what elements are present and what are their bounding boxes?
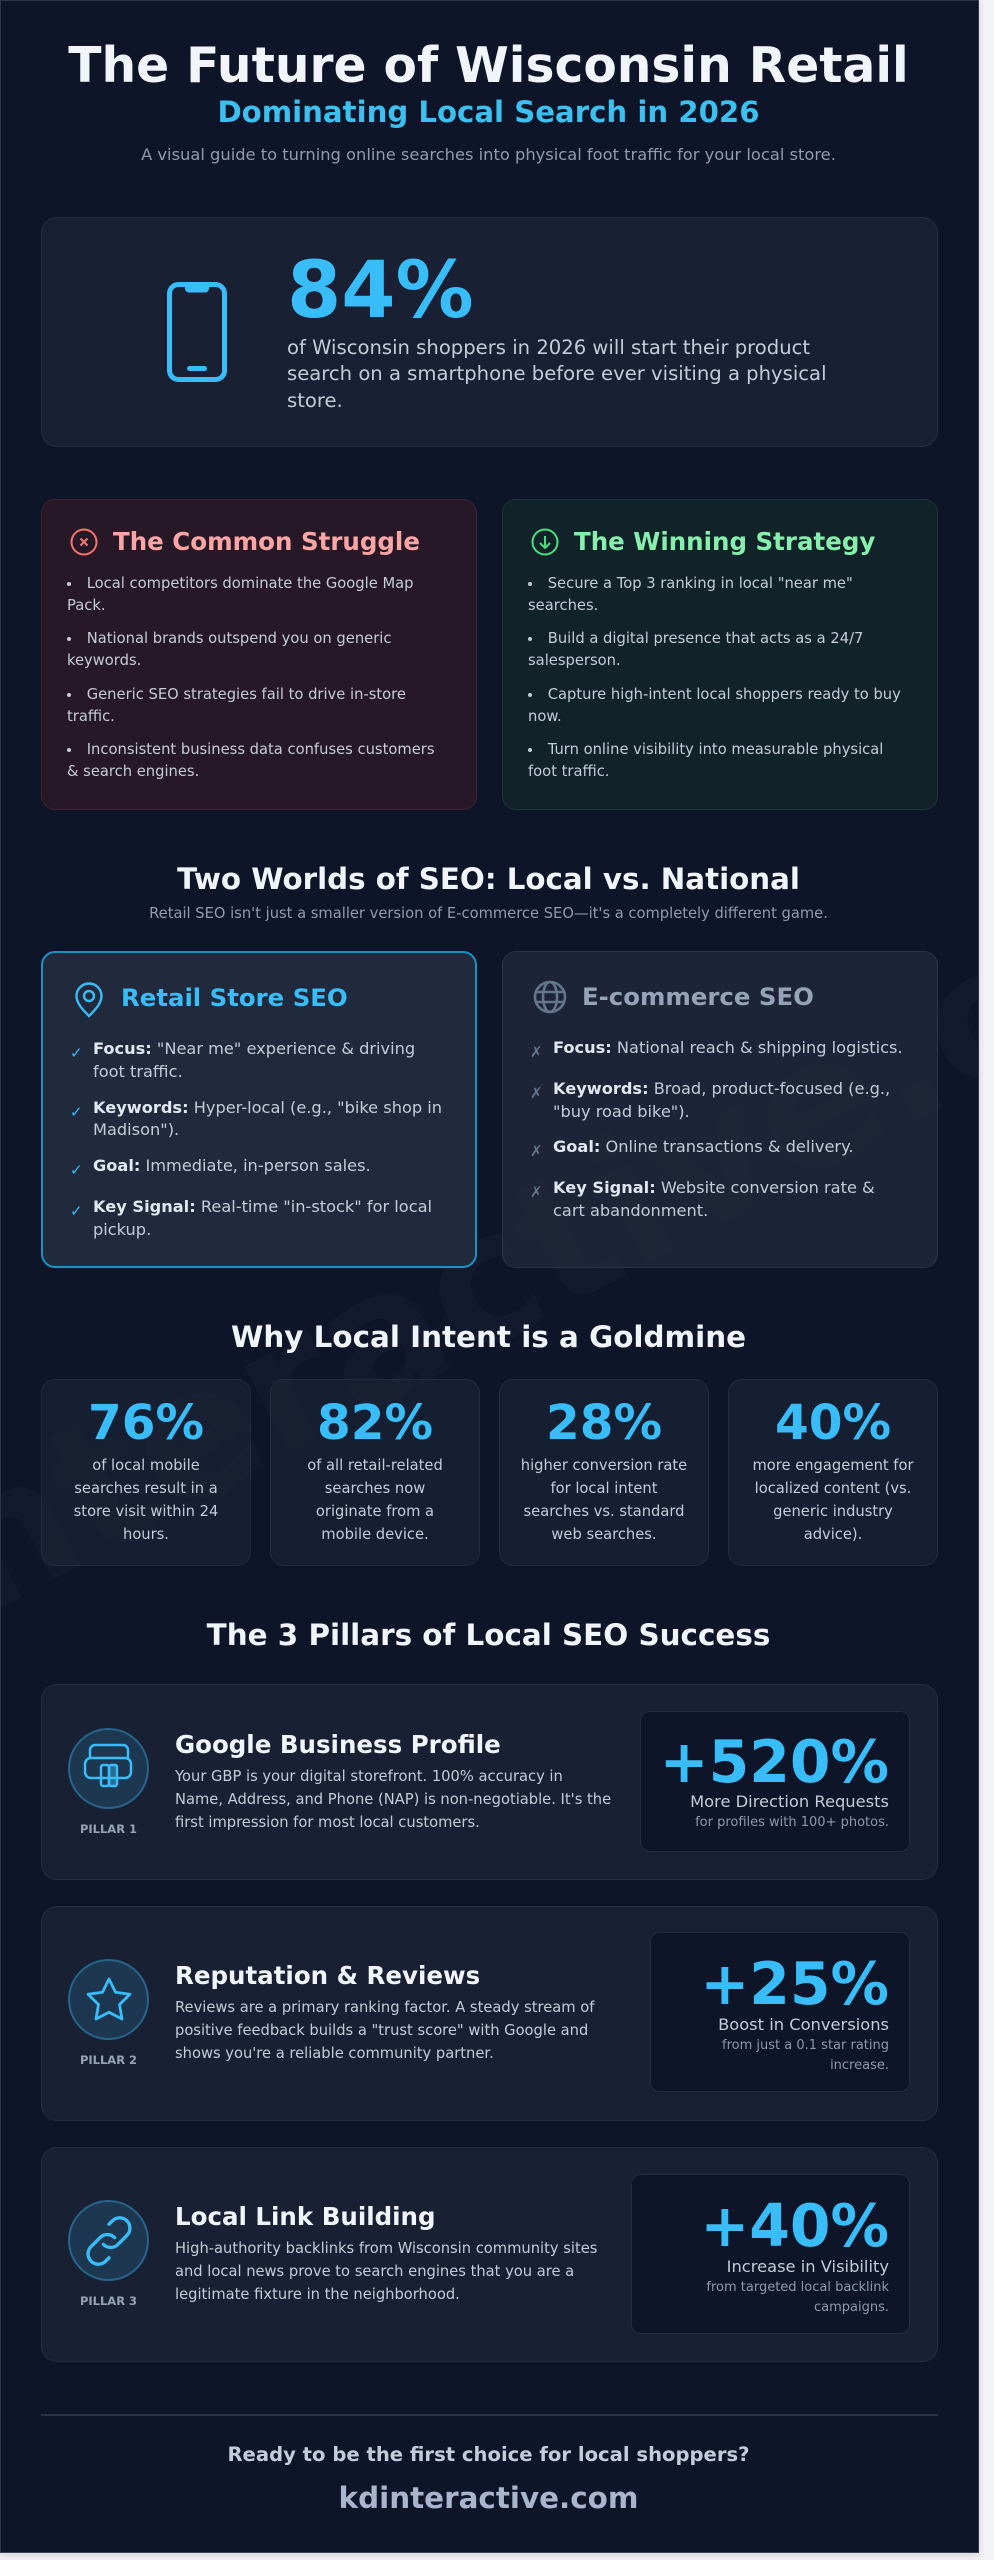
- stat card: 82%: [270, 1379, 480, 1566]
- icon: smartphone: [167, 282, 227, 382]
- pillar text: first impression for most local customers.: [175, 1814, 480, 1831]
- result note: campaigns.: [814, 2300, 889, 2314]
- panel: pillar 3: [41, 2147, 938, 2362]
- panel: e-commerce seo: [502, 951, 938, 1268]
- icon: x circle: [70, 528, 98, 556]
- list: strategies: Build a digital presence that acts as a 24/7: [548, 630, 863, 647]
- panel: retail store seo: ✓: [70, 1202, 83, 1220]
- list: struggles: [67, 575, 434, 780]
- panel: hero stat: [41, 217, 938, 447]
- list: e-commerce: Keywords: Broad, product-focused (e.g.,: [553, 1079, 890, 1098]
- hero description: store.: [287, 389, 343, 412]
- list: struggles: keywords.: [67, 652, 141, 669]
- icon: storefront: [68, 1728, 149, 1809]
- hero description: [287, 336, 827, 412]
- icon: link: [68, 2200, 149, 2281]
- list: retail: [70, 1039, 442, 1239]
- list: struggles: Local competitors dominate the Google Map: [87, 575, 414, 592]
- icon: arrow down circle: [532, 528, 558, 556]
- big number: 84%: [287, 246, 474, 336]
- footer call to action: Ready to be the first choice for local shoppers?: [227, 2443, 750, 2466]
- stat card: 76%: store visit within 24: [74, 1503, 218, 1520]
- pillar label: PILLAR 2: [80, 2053, 137, 2067]
- panel: the winning strategy: [502, 499, 938, 810]
- result box: [631, 2174, 910, 2334]
- stat card: 40%: generic industry: [773, 1503, 893, 1520]
- stat card: 82%: of all retail-related: [307, 1457, 443, 1474]
- panel: e-commerce seo: ✗: [530, 1043, 543, 1061]
- stat card: 40%: localized content (vs.: [755, 1480, 911, 1497]
- list: strategies: Secure a Top 3 ranking in local "near me": [548, 575, 853, 592]
- pillar title: Reputation & Reviews: [175, 1961, 480, 1990]
- result number: +40%: [700, 2192, 889, 2260]
- list: strategies: searches.: [528, 597, 598, 614]
- pillar text: Your GBP is your digital storefront. 100% accuracy in: [175, 1768, 563, 1785]
- list: retail: Goal: Immediate, in-person sales.: [93, 1156, 371, 1175]
- stat card: 76%: [41, 1379, 251, 1566]
- panel: e-commerce seo: ✗: [530, 1084, 543, 1102]
- panel: e-commerce seo: ✗: [530, 1183, 543, 1201]
- icon: globe: [534, 980, 566, 1014]
- list: strategies: now.: [528, 708, 562, 725]
- heading: The Common Struggle: [113, 527, 420, 556]
- result label: Boost in Conversions: [718, 2015, 889, 2034]
- panel: retail store seo: ✓: [70, 1161, 83, 1179]
- panel: retail store seo: [41, 951, 477, 1268]
- result note: [706, 2280, 889, 2314]
- list: e-commerce: cart abandonment.: [553, 1201, 708, 1220]
- stat card: 82%: mobile device.: [321, 1526, 429, 1543]
- result note: from targeted local backlink: [706, 2280, 889, 2295]
- pillar label: PILLAR 1: [80, 1822, 137, 1836]
- stat card: 82%: 82%: [317, 1395, 433, 1451]
- pillar text: Name, Address, and Phone (NAP) is non-negotiable. It's the: [175, 1791, 611, 1808]
- hero description: of Wisconsin shoppers in 2026 will start their product: [287, 336, 810, 359]
- pillar title: Local Link Building: [175, 2202, 436, 2231]
- icon: star: [68, 1959, 149, 2040]
- pillar text: [175, 1999, 595, 2062]
- stat card: 82%: originate from a: [316, 1503, 434, 1520]
- stat card: 40%: advice).: [804, 1526, 862, 1543]
- list: strategies: Capture high-intent local shoppers ready to buy: [548, 686, 901, 703]
- result number: +520%: [660, 1728, 889, 1796]
- panel: retail store seo: ✓: [70, 1103, 83, 1121]
- list: e-commerce: [530, 1038, 903, 1220]
- list: e-commerce: "buy road bike").: [553, 1102, 690, 1121]
- list: struggles: traffic.: [67, 708, 115, 725]
- stat card: 76%: hours.: [123, 1526, 169, 1543]
- stat card: 40%: [728, 1379, 938, 1566]
- heading: two worlds: Two Worlds of SEO: Local vs. National: [177, 862, 800, 896]
- stat card: 76%: 76%: [88, 1395, 204, 1451]
- stat card: 40%: more engagement for: [752, 1457, 914, 1474]
- list: strategies: salesperson.: [528, 652, 621, 669]
- result label: Increase in Visibility: [727, 2257, 889, 2276]
- list: strategies: Turn online visibility into measurable physical: [548, 741, 883, 758]
- title: The Future of Wisconsin Retail: [68, 38, 909, 94]
- list: retail: foot traffic.: [93, 1062, 183, 1081]
- stat card: 28%: searches vs. standard: [524, 1503, 684, 1520]
- footer website: kdinteractive.com: [339, 2481, 638, 2515]
- pillar text: positive feedback builds a "trust score" with Google and: [175, 2022, 588, 2039]
- pillar title: Google Business Profile: [175, 1730, 501, 1759]
- heading: Retail Store SEO: [121, 983, 348, 1012]
- heading: pillars: The 3 Pillars of Local SEO Success: [207, 1618, 770, 1652]
- stat card: 28%: web searches.: [551, 1526, 657, 1543]
- stat card: 76%: searches result in a: [74, 1480, 218, 1497]
- pillar text: Reviews are a primary ranking factor. A steady stream of: [175, 1999, 594, 2016]
- result note: increase.: [830, 2058, 889, 2072]
- icon: map pin: [75, 982, 103, 1018]
- list: retail: Key Signal: Real-time "in-stock" for local: [93, 1197, 432, 1216]
- pillar text: [175, 2240, 597, 2303]
- hero description: search on a smartphone before ever visiting a physical: [287, 362, 827, 385]
- result note: for profiles with 100+ photos.: [695, 1815, 889, 1830]
- section intro: Retail SEO isn't just a smaller version of E-commerce SEO—it's a completely different game.: [149, 905, 828, 922]
- list: e-commerce: Key Signal: Website conversion rate &: [553, 1178, 875, 1197]
- stat card: 76%: of local mobile: [92, 1457, 200, 1474]
- pillar text: [175, 1768, 611, 1831]
- list: struggles: Inconsistent business data confuses customers: [87, 741, 434, 758]
- list: retail: Focus: "Near me" experience & driving: [93, 1039, 415, 1058]
- result box: [640, 1711, 910, 1852]
- stat card: 28%: higher conversion rate: [521, 1457, 687, 1474]
- list: struggles: & search engines.: [67, 763, 199, 780]
- panel: pillar 2: [41, 1906, 938, 2121]
- heading: goldmine: Why Local Intent is a Goldmine: [231, 1320, 746, 1354]
- list: retail: Madison").: [93, 1120, 179, 1139]
- heading: The Winning Strategy: [574, 527, 875, 556]
- stat card: 28%: for local intent: [550, 1480, 658, 1497]
- subtitle: Dominating Local Search in 2026: [217, 95, 760, 129]
- list: retail: Keywords: Hyper-local (e.g., "bike shop in: [93, 1098, 442, 1117]
- list: e-commerce: Goal: Online transactions & delivery.: [553, 1137, 854, 1156]
- list: struggles: Generic SEO strategies fail to drive in-store: [87, 686, 406, 703]
- result label: More Direction Requests: [690, 1792, 889, 1811]
- panel: the common struggle: [41, 499, 477, 810]
- result number: +25%: [700, 1950, 889, 2018]
- pillar text: shows you're a reliable community partner.: [175, 2045, 494, 2062]
- list: struggles: Pack.: [67, 597, 106, 614]
- pillar text: legitimate fixture in the neighborhood.: [175, 2286, 460, 2303]
- panel: retail store seo: ✓: [70, 1044, 83, 1062]
- panel: e-commerce seo: ✗: [530, 1142, 543, 1160]
- list: retail: pickup.: [93, 1220, 151, 1239]
- result note: [722, 2038, 889, 2072]
- result box: [650, 1932, 910, 2092]
- pillar text: and local news prove to search engines that you are a: [175, 2263, 574, 2280]
- list: strategies: foot traffic.: [528, 763, 610, 780]
- footer divider: [41, 2414, 938, 2416]
- list: e-commerce: Focus: National reach & shipping logistics.: [553, 1038, 903, 1057]
- stat card: 40%: 40%: [775, 1395, 891, 1451]
- panel: pillar 1: [41, 1684, 938, 1880]
- stat card: 82%: searches now: [325, 1480, 425, 1497]
- list: struggles: National brands outspend you on generic: [87, 630, 391, 647]
- pillar text: High-authority backlinks from Wisconsin community sites: [175, 2240, 597, 2257]
- stat card: 28%: 28%: [546, 1395, 662, 1451]
- pillar label: PILLAR 3: [80, 2294, 137, 2308]
- heading: E-commerce SEO: [582, 982, 814, 1011]
- intro text: A visual guide to turning online searches into physical foot traffic for your local store.: [141, 145, 836, 164]
- stat card: 28%: [499, 1379, 709, 1566]
- list: strategies: [528, 575, 901, 780]
- result note: from just a 0.1 star rating: [722, 2038, 889, 2053]
